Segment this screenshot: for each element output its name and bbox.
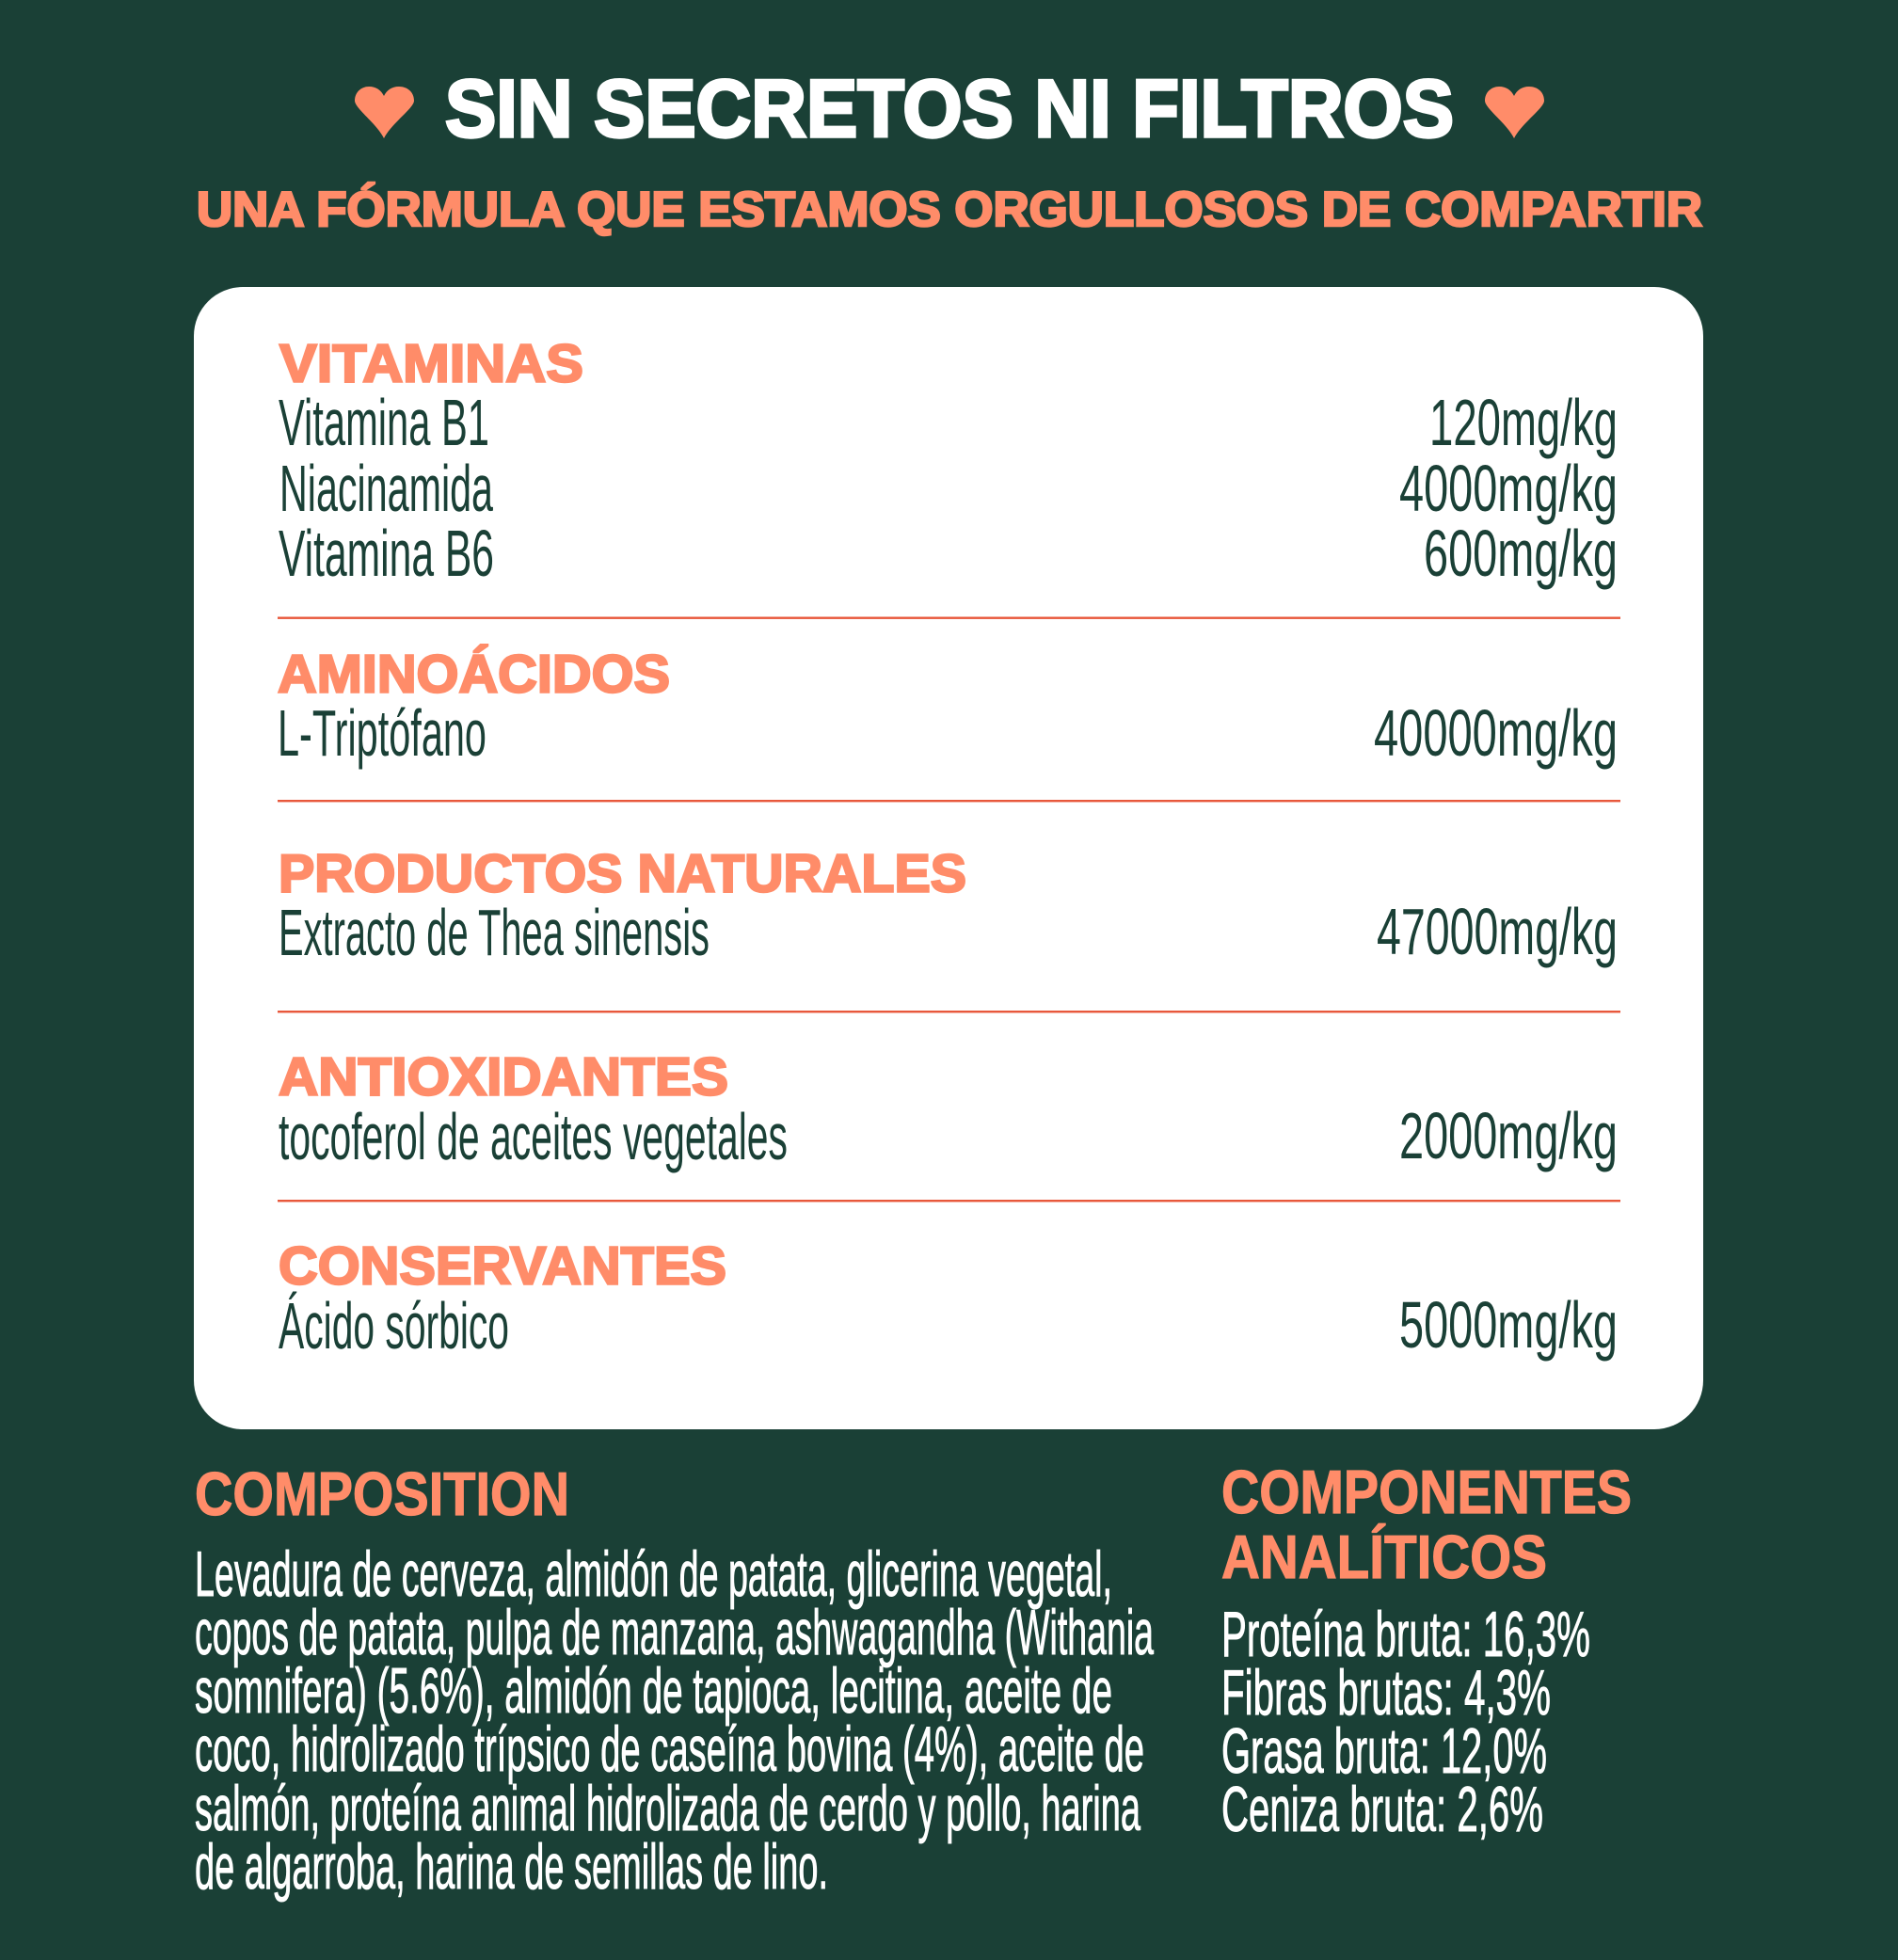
section: productos naturales: PRODUCTOS NATURALES (279, 843, 966, 903)
section: antioxidantes: ANTIOXIDANTES (279, 1046, 728, 1107)
section: conservantes: 5000mg/kg (1399, 1288, 1618, 1362)
text block: analytical values: Grasa bruta: 12,0% (1221, 1715, 1547, 1787)
section: antioxidantes (279, 1046, 1618, 1173)
text block: analytical values: Proteína bruta: 16,3% (1221, 1599, 1590, 1670)
section: aminoácidos: AMINOÁCIDOS (278, 644, 670, 704)
section: aminoácidos: 40000mg/kg (1374, 696, 1618, 770)
text block: analytical values: Ceniza bruta: 2,6% (1221, 1774, 1543, 1845)
subtitle: UNA FÓRMULA QUE ESTAMOS ORGULLOSOS DE COMPARTIR (197, 183, 1702, 237)
section: antioxidantes: tocoferol de aceites vegetales (279, 1100, 788, 1173)
text block: composition: copos de patata, pulpa de manzana, ashwagandha (Withania (195, 1597, 1154, 1668)
section: vitaminas (279, 333, 1618, 590)
section: vitaminas: VITAMINAS (279, 333, 583, 393)
panel: ingredients card (194, 287, 1703, 1429)
title text: SIN SECRETOS NI FILTROS (445, 64, 1454, 154)
text block: composition: somnifera) (5.6%), almidón de tapioca, lecitina, aceite de (195, 1655, 1112, 1727)
heading: composition: COMPOSITION (195, 1459, 569, 1528)
icon: left heart (355, 87, 414, 138)
section: vitaminas: 120mg/kg (1429, 386, 1618, 459)
text block: composition: Levadura de cerveza, almidón de patata, glicerina vegetal, (195, 1538, 1112, 1610)
text block: composition: de algarroba, harina de semillas de lino. (195, 1831, 828, 1903)
section: conservantes (279, 1236, 1618, 1362)
section: productos naturales (279, 843, 1618, 969)
section: vitaminas: 600mg/kg (1424, 517, 1618, 590)
heading: componentes analíticos (1221, 1458, 1632, 1591)
section: conservantes: Ácido sórbico (279, 1289, 509, 1362)
section: vitaminas: Vitamina B1 (279, 386, 489, 459)
title with hearts (355, 64, 1544, 154)
section: vitaminas: 4000mg/kg (1399, 452, 1618, 525)
section: aminoácidos: L-Triptófano (278, 696, 486, 770)
section: vitaminas: Vitamina B6 (279, 517, 494, 590)
icon: right heart (1485, 87, 1544, 138)
heading: componentes analíticos: ANALÍTICOS (1221, 1522, 1547, 1591)
text block: composition (195, 1538, 1154, 1903)
section: conservantes: CONSERVANTES (279, 1236, 726, 1297)
text block: composition: coco, hidrolizado trípsico de caseína bovina (4%), aceite de (195, 1713, 1144, 1785)
section: productos naturales: 47000mg/kg (1377, 895, 1618, 968)
text block: composition: salmón, proteína animal hidrolizada de cerdo y pollo, harina (195, 1773, 1140, 1844)
text block: analytical values (1221, 1599, 1590, 1845)
section: productos naturales: Extracto de Thea sinensis (279, 896, 710, 969)
heading: componentes analíticos: COMPONENTES (1221, 1458, 1632, 1526)
text block: analytical values: Fibras brutas: 4,3% (1221, 1657, 1551, 1729)
section: vitaminas: Niacinamida (279, 452, 493, 525)
section: antioxidantes: 2000mg/kg (1399, 1099, 1618, 1172)
section: aminoácidos (278, 644, 1618, 770)
